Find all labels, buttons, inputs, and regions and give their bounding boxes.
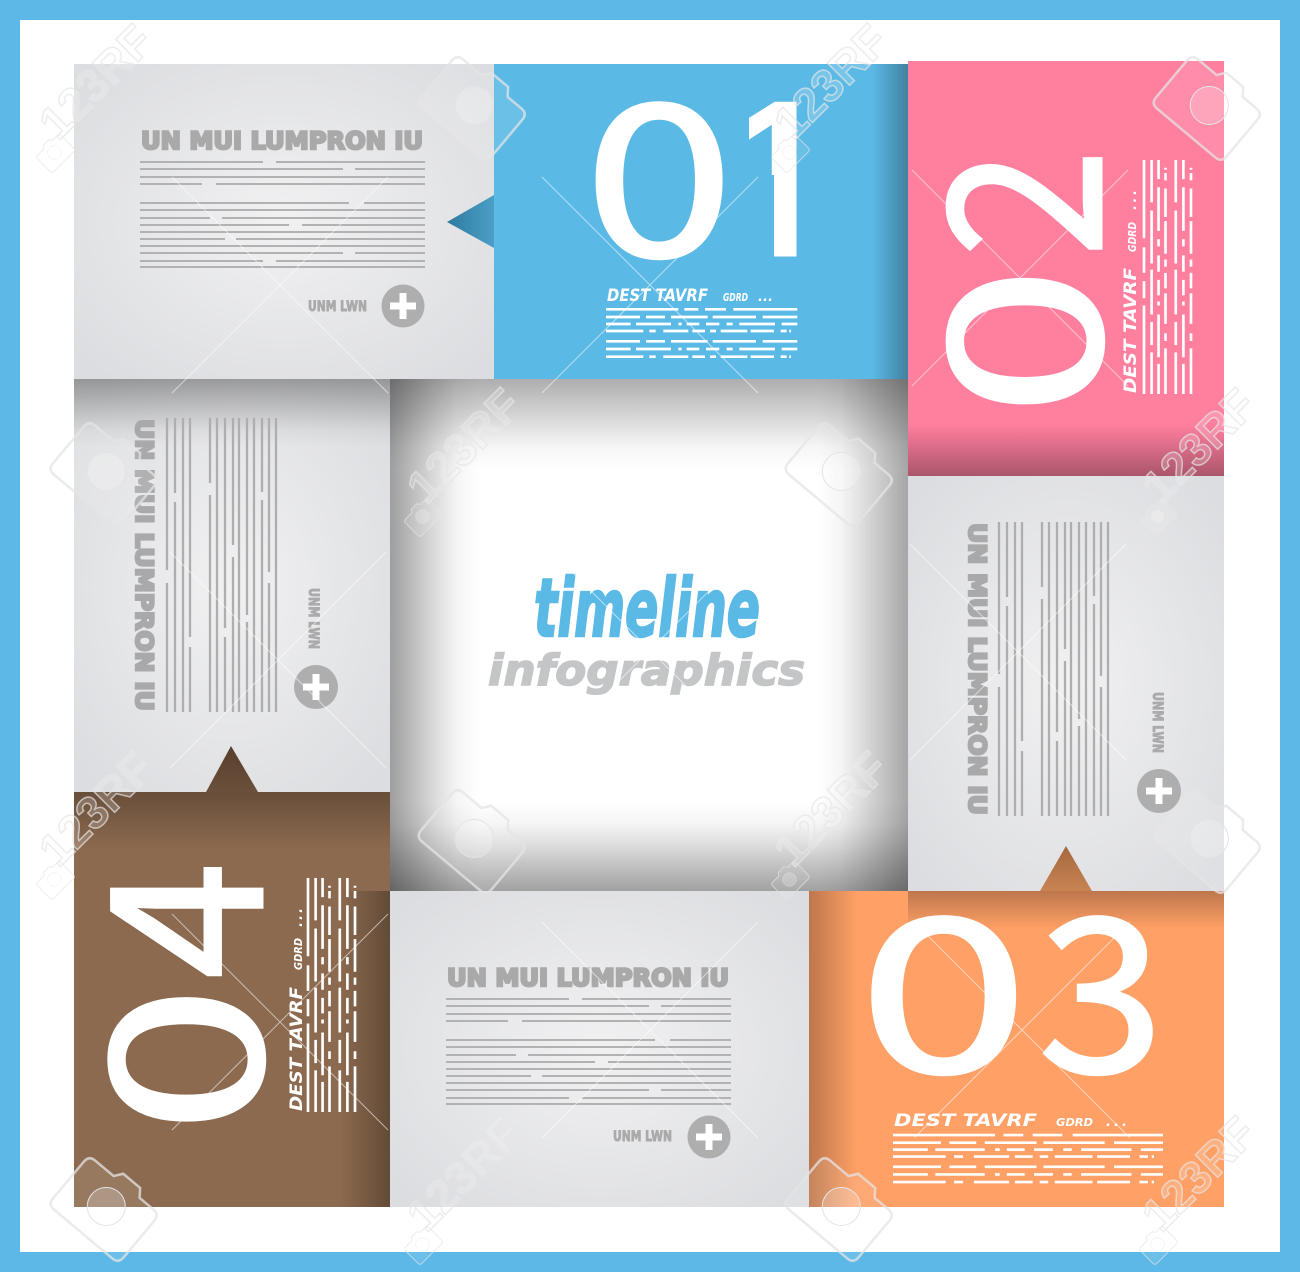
- heading: step 04: DEST TAVRF: [287, 987, 307, 1111]
- heading: step 04: ...: [291, 908, 306, 927]
- body lines: card 2: [999, 522, 1108, 816]
- watermark overlay: 123RF: [28, 14, 163, 149]
- heading: step 01: [607, 286, 773, 306]
- panel: blue step 01: [447, 64, 908, 379]
- heading: step 02: [1121, 190, 1141, 393]
- heading: step 03: GDRD: [1056, 1116, 1093, 1129]
- body lines: card 1: [140, 162, 425, 267]
- icon: plus button card 3: [688, 1116, 730, 1158]
- number 03: [858, 824, 1164, 1134]
- body lines: card 4: [167, 418, 276, 712]
- subtitle: infographics: infographics: [488, 646, 805, 696]
- number 02: [855, 149, 1162, 416]
- body lines: step 02: [1144, 160, 1191, 394]
- heading: step 03: [894, 1111, 1127, 1131]
- label: card 3 more: UNM LWN: [613, 1129, 672, 1145]
- panel: brown step 04: [17, 792, 390, 1207]
- panel: pink step 02: [855, 61, 1224, 476]
- watermark overlay: 123RF: [396, 378, 531, 513]
- panel: grey card 3 text: [390, 891, 809, 1207]
- heading: card 1: UN MUI LUMPRON IU: [141, 127, 423, 155]
- number 01: [596, 101, 796, 260]
- heading: step 02: GDRD: [1126, 222, 1139, 252]
- label: card 2 more: UNM LWN: [1149, 692, 1165, 753]
- body lines: step 04: [308, 878, 355, 1112]
- number 02: 2: [855, 149, 1162, 257]
- number 04: 0: [17, 986, 323, 1133]
- panel: grey card 2 text: [908, 476, 1224, 891]
- watermark overlay: 123RF: [1131, 1106, 1266, 1241]
- watermark overlay: 123RF: [1131, 378, 1266, 513]
- number 03: 0: [858, 824, 1029, 1134]
- watermark overlay: 123RF: [28, 741, 163, 876]
- icon: plus button card 4: [294, 665, 338, 709]
- body lines: step 01: [606, 309, 797, 357]
- heading: step 01: GDRD: [723, 291, 748, 304]
- number 03: 3: [1038, 824, 1164, 1134]
- heading: card 2: UN MUI LUMPRON IU: [963, 523, 991, 815]
- watermark overlay: 123RF: [396, 1106, 531, 1241]
- panel: grey card 4 text: [74, 379, 390, 792]
- heading: step 01: DEST TAVRF: [607, 286, 708, 306]
- number 04: [17, 862, 323, 1133]
- title: timeline: timeline: [534, 562, 760, 655]
- watermark overlay: 123RF: [763, 14, 898, 149]
- heading: step 02: ...: [1125, 190, 1140, 210]
- heading: card 4: UN MUI LUMPRON IU: [130, 419, 158, 711]
- heading: step 01: ...: [758, 290, 773, 305]
- heading: step 03: DEST TAVRF: [894, 1111, 1037, 1131]
- heading: step 04: [287, 908, 307, 1111]
- label: card 1 more: UNM LWN: [308, 299, 367, 315]
- number 02: 0: [855, 267, 1162, 416]
- icon: plus button card 2: [1137, 769, 1181, 813]
- watermark overlay: 123RF: [763, 741, 898, 876]
- panel: centre title: [390, 379, 908, 891]
- panel: grey card 1 text: [74, 64, 494, 379]
- number 01: 0: [584, 11, 734, 317]
- heading: step 02: DEST TAVRF: [1121, 268, 1141, 393]
- heading: card 3: UN MUI LUMPRON IU: [447, 964, 729, 992]
- arrow: orange pointer left: [763, 1022, 809, 1077]
- heading: step 04: GDRD: [292, 938, 305, 970]
- body lines: card 3: [446, 999, 731, 1104]
- number 04: 4: [17, 862, 323, 979]
- arrow: orange pointer up: [1040, 846, 1092, 891]
- heading: step 03: ...: [1106, 1115, 1127, 1130]
- arrow: blue pointer: [447, 195, 494, 248]
- body lines: step 03: [893, 1135, 1163, 1182]
- icon: plus button card 1: [382, 284, 424, 328]
- number 01: 1: [712, 56, 848, 304]
- arrow: brown pointer up: [206, 746, 258, 792]
- label: card 4 more: UNM LWN: [305, 588, 321, 649]
- panel: orange step 03: [763, 824, 1224, 1207]
